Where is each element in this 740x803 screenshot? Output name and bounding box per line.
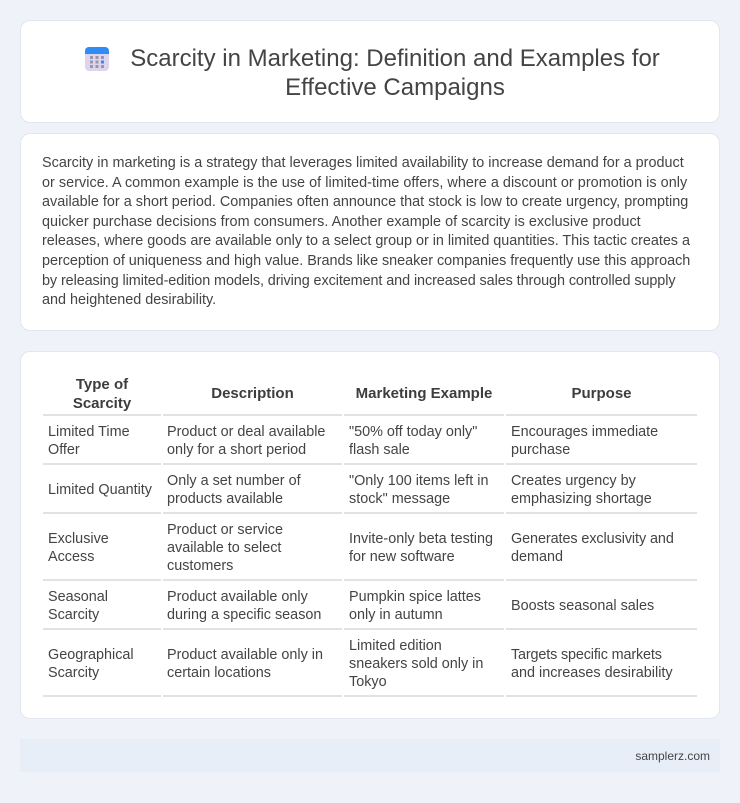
table header: type of scarcity: Scarcity [73,395,131,412]
row: exclusive access: Exclusive [48,531,109,547]
row: limited time offer: Offer [48,442,80,458]
row: limited quantity: Only a set number of [167,473,301,489]
intro paragraph: Scarcity in marketing is a strategy that leverages limited availability to increase demand for a product [42,155,684,171]
table header: type of scarcity [73,376,132,412]
intro paragraph: and heightened desirability. [42,292,216,308]
row: exclusive access: Product or service [167,522,283,538]
table header: description: Description [211,385,294,402]
row: limited quantity: emphasizing shortage [511,491,652,507]
row: limited quantity: Limited Quantity [48,482,152,498]
row: seasonal scarcity: Product available only [167,589,308,605]
row: limited time offer: purchase [511,442,570,458]
row: limited time offer [48,424,658,458]
row: seasonal scarcity: Seasonal [48,589,108,605]
footer source: samplerz.com [635,749,710,763]
row: exclusive access: for new software [349,549,455,565]
row: exclusive access: Generates exclusivity and [511,531,674,547]
row: geographical scarcity: Geographical [48,647,134,663]
row: geographical scarcity: and increases desirability [511,665,673,681]
row: geographical scarcity: Tokyo [349,674,387,690]
row: limited time offer: only for a short period [167,442,306,458]
row: exclusive access: Invite-only beta testing [349,531,493,547]
row: limited quantity: Creates urgency by [511,473,636,489]
icon: calendar [85,47,109,71]
row: limited quantity: "Only 100 items left in [349,473,488,489]
row: limited time offer: "50% off today only" [349,424,477,440]
row: geographical scarcity: sneakers sold only in [349,656,483,672]
title: Scarcity in Marketing: Definition and Examples for [130,45,660,72]
intro paragraph: available for a short period. Companies often announce that stock is low to create urgency, prompting [42,194,688,210]
row: seasonal scarcity: Scarcity [48,607,99,623]
panel: header [20,20,720,123]
panel: intro text [20,133,720,331]
row: seasonal scarcity [48,589,654,623]
intro paragraph: releases, where goods are available only to a select group or in limited quantities. This tactic creates a [42,233,690,249]
table header: purpose: Purpose [571,385,632,402]
row: geographical scarcity: Scarcity [48,665,99,681]
intro paragraph: by releasing limited-edition models, driving excitement and increased sales through controlled supply [42,273,675,289]
row: geographical scarcity: Limited edition [349,638,442,654]
row: exclusive access: available to select [167,540,281,556]
row: limited time offer: Product or deal available [167,424,325,440]
row: seasonal scarcity: during a specific season [167,607,321,623]
row: exclusive access: customers [167,558,233,574]
row: exclusive access: demand [511,549,563,565]
title: Effective Campaigns [285,74,505,101]
row: limited time offer: Limited Time [48,424,130,440]
row: limited quantity: products available [167,491,283,507]
panel: table [20,351,720,719]
row: seasonal scarcity: Boosts seasonal sales [511,598,654,614]
footer bar [20,739,720,772]
row: seasonal scarcity: only in autumn [349,607,443,623]
row: geographical scarcity: Targets specific markets [511,647,662,663]
intro paragraph: quicker purchase decisions from consumers. Another example of scarcity is exclusive product [42,214,641,230]
title [130,45,660,101]
row: geographical scarcity [48,638,673,690]
table header: marketing example: Marketing Example [356,385,492,402]
row: exclusive access [48,522,674,574]
row: seasonal scarcity: Pumpkin spice lattes [349,589,481,605]
row: limited time offer: Encourages immediate [511,424,658,440]
row: geographical scarcity: Product available only in [167,647,323,663]
table header: type of scarcity: Type of [76,376,128,393]
row: limited quantity: stock" message [349,491,450,507]
intro paragraph [42,155,690,308]
row: limited time offer: flash sale [349,442,410,458]
row: exclusive access: Access [48,549,94,565]
row: limited quantity [48,473,652,507]
intro paragraph: or service. A common example is the use of limited-time offers, where a discount or promotion is only [42,175,687,191]
row: geographical scarcity: certain locations [167,665,271,681]
intro paragraph: perception of uniqueness and high value. Brands like sneaker companies frequently use this approach [42,253,690,269]
